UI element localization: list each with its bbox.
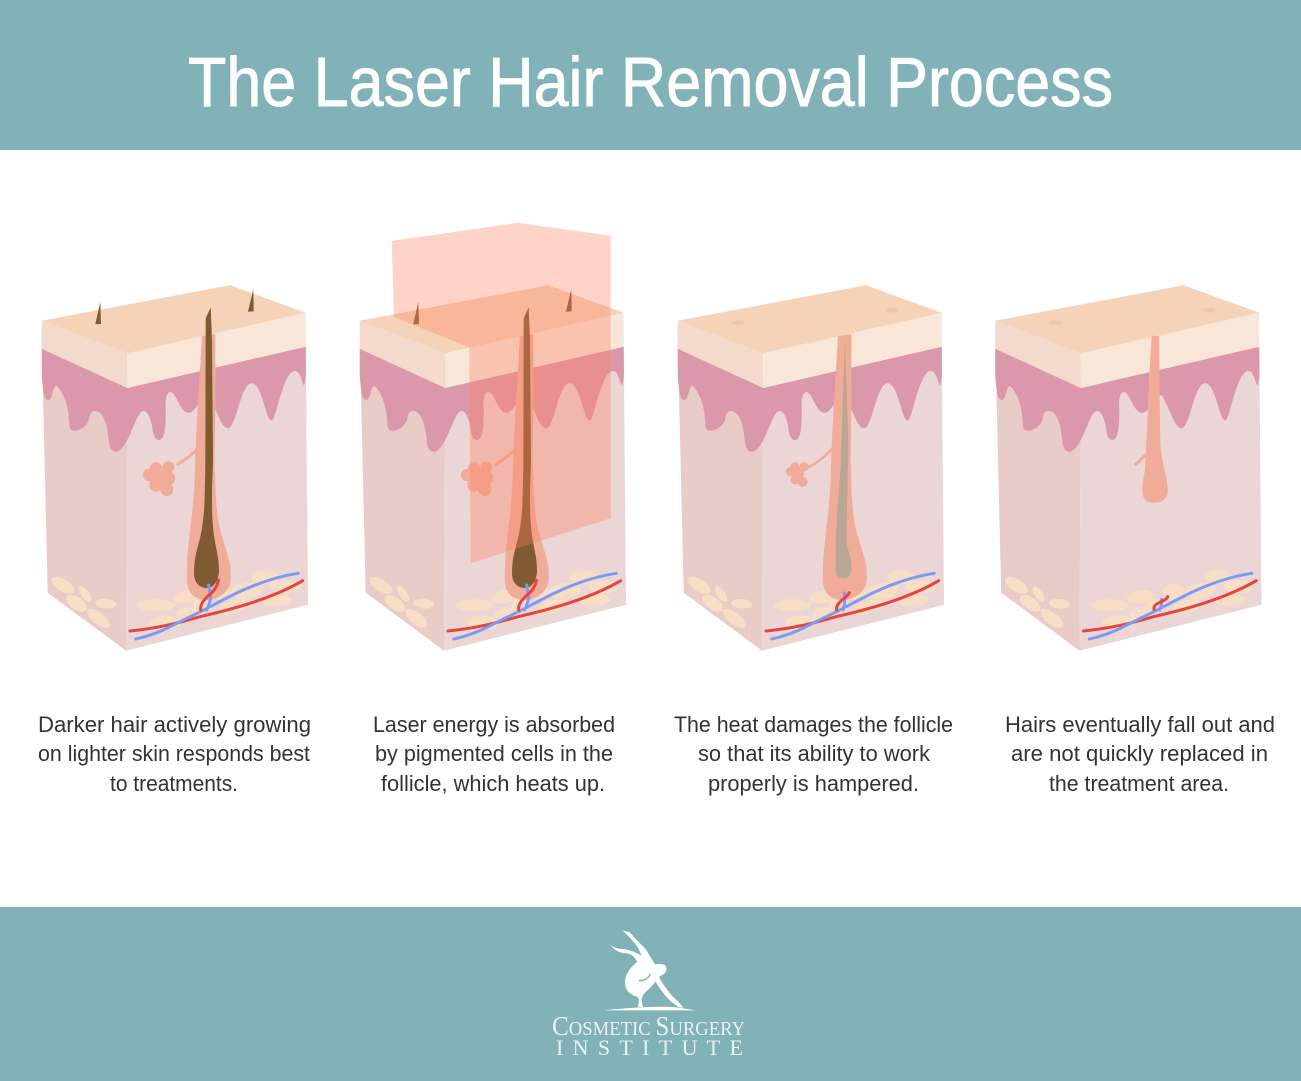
caption 2: by pigmented cells in the bbox=[375, 741, 613, 766]
logo: institute line: INSTITUTE bbox=[556, 1035, 743, 1060]
panel 3: damaged follicle skin diagram bbox=[678, 285, 944, 651]
caption 3: The heat damages the follicle bbox=[674, 712, 953, 737]
caption 2: follicle, which heats up. bbox=[381, 771, 605, 796]
caption 4: the treatment area. bbox=[1049, 771, 1229, 796]
caption 3: so that its ability to work bbox=[698, 741, 931, 766]
caption 1 bbox=[38, 712, 311, 796]
caption 4: are not quickly replaced in bbox=[1011, 741, 1268, 766]
damaged hair shaft bbox=[836, 342, 852, 578]
caption 3: properly is hampered. bbox=[708, 771, 919, 796]
panel 1: growing hair skin diagram bbox=[42, 285, 308, 651]
title: The Laser Hair Removal Process bbox=[188, 43, 1113, 121]
caption 4 bbox=[1005, 712, 1275, 796]
laser beam overlay bbox=[392, 223, 611, 563]
caption 2 bbox=[373, 712, 615, 796]
caption 2: Laser energy is absorbed bbox=[373, 712, 615, 737]
shrunken oil gland bbox=[786, 448, 833, 487]
logo: dancer figure bbox=[605, 931, 696, 1010]
caption 1: Darker hair actively growing bbox=[38, 712, 311, 737]
short capillary branch bbox=[836, 593, 849, 610]
short capillary branch bbox=[1154, 597, 1168, 610]
follicle remnant duct bbox=[1136, 455, 1146, 464]
caption 1: to treatments. bbox=[110, 771, 238, 796]
shrunken follicle bbox=[1142, 336, 1168, 503]
footer banner bbox=[0, 907, 1301, 1081]
header banner bbox=[0, 0, 1301, 150]
panel 2: laser absorbed skin diagram bbox=[360, 285, 626, 651]
logo: wordmark: COSMETIC SURGERY bbox=[552, 1011, 745, 1041]
caption 4: Hairs eventually fall out and bbox=[1005, 712, 1275, 737]
caption 1: on lighter skin responds best bbox=[38, 741, 311, 766]
panel 4: hair gone skin diagram bbox=[995, 285, 1262, 651]
caption 3 bbox=[674, 712, 953, 796]
